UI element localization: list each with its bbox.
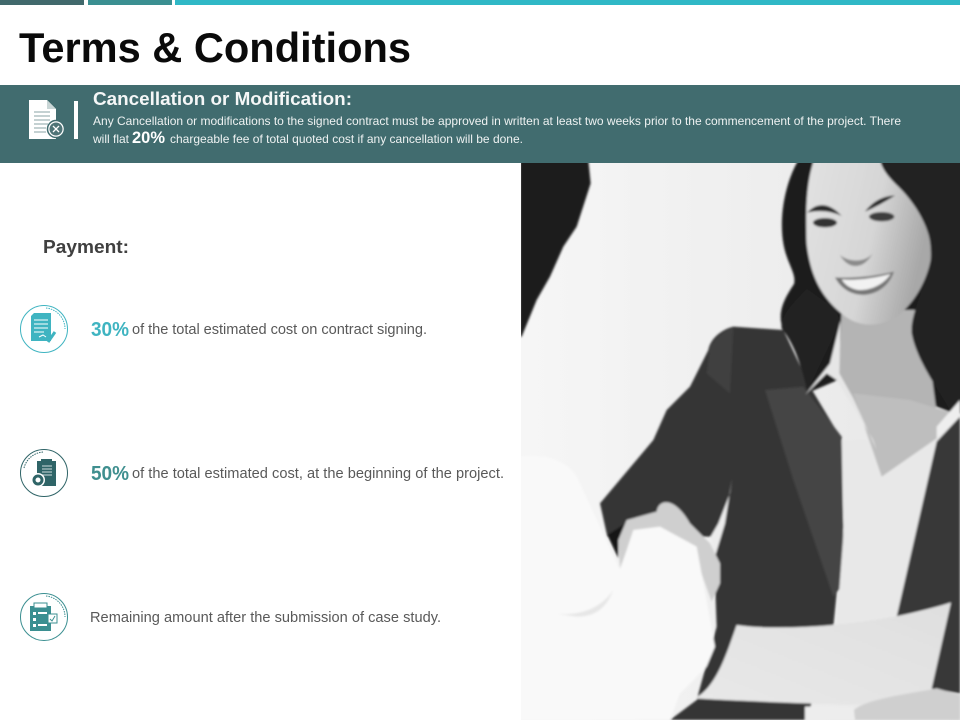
woman's hair back xyxy=(781,160,960,413)
item 2 text: of the total estimated cost, at the beginning of the project. xyxy=(132,466,504,482)
eyes xyxy=(813,218,837,227)
banner body text: Any Cancellation or modifications to the signed contract must be approved in written at least two weeks prior to the commencement of the project. There xyxy=(93,114,901,128)
neck xyxy=(838,310,937,447)
hair right strand xyxy=(880,160,960,410)
item 1 percentage: 30% xyxy=(91,319,129,341)
woman's right jacket side xyxy=(897,417,960,693)
eyebrows xyxy=(807,195,895,216)
gap between arm and jacket xyxy=(711,478,732,557)
face xyxy=(806,160,932,325)
icon: clipboard with gear xyxy=(20,450,68,496)
payment item 2 xyxy=(20,450,504,496)
payment item 3 xyxy=(20,594,441,640)
cancellation banner xyxy=(0,85,960,163)
title: Terms & Conditions xyxy=(19,24,411,71)
banner body text: will flat xyxy=(92,132,130,146)
collar xyxy=(805,320,877,450)
item 1 text: of the total estimated cost on contract signing. xyxy=(132,322,427,338)
payment heading: Payment: xyxy=(43,236,129,257)
hand holding paper xyxy=(854,688,960,720)
shirt xyxy=(837,413,960,625)
icon: document with cancel mark xyxy=(29,100,64,139)
neck opening xyxy=(853,393,953,477)
banner body text xyxy=(92,114,901,147)
banner body text: chargeable fee of total quoted cost if any cancellation will be done. xyxy=(170,132,523,146)
photo: handshake between man and smiling woman xyxy=(520,160,960,720)
jacket xyxy=(600,327,843,720)
item 3 text: Remaining amount after the submission of case study. xyxy=(90,610,441,626)
left hair over shoulder xyxy=(782,288,840,392)
banner heading: Cancellation or Modification: xyxy=(93,88,352,109)
man's shoulder and arm xyxy=(520,456,715,720)
icon: signed contract xyxy=(20,306,68,352)
nose shadow xyxy=(840,253,873,266)
top accent bars xyxy=(0,0,960,5)
icon: checklist clipboard xyxy=(20,594,68,640)
paper sheet xyxy=(695,602,951,705)
vertical divider xyxy=(74,101,78,139)
item 2 percentage: 50% xyxy=(91,463,129,485)
payment item 1 xyxy=(20,306,427,352)
dark gap at cuff xyxy=(607,522,628,558)
man's head xyxy=(520,160,591,337)
clasped hand xyxy=(618,502,720,602)
banner body text: 20% xyxy=(132,129,165,147)
lips and teeth xyxy=(835,272,894,295)
